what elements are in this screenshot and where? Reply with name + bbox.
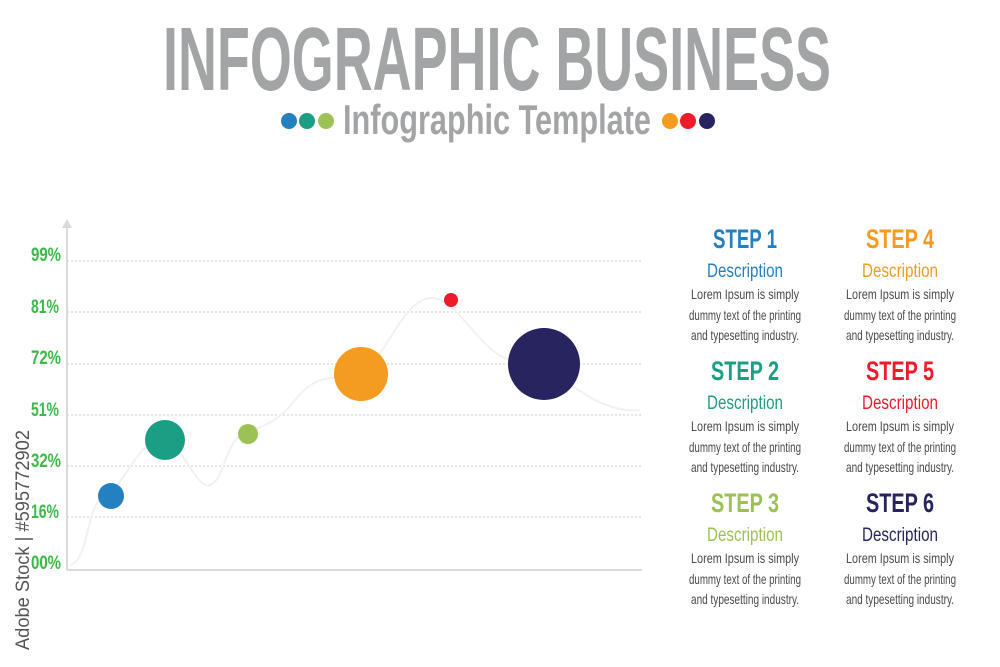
step 5: Description: [862, 393, 938, 414]
watermark id: Adobe Stock | #595772902: [13, 430, 34, 650]
step 5: [844, 356, 956, 475]
step 5: STEP 5: [866, 356, 934, 386]
axes: [67, 226, 642, 570]
step 3: and typesetting industry.: [691, 591, 799, 607]
step 5: and typesetting industry.: [846, 459, 954, 475]
y axis labels: 51%: [31, 400, 59, 421]
y axis labels: 99%: [31, 245, 61, 266]
steps panel: [689, 224, 956, 607]
subtitle: [281, 96, 715, 143]
step 3: Description: [707, 525, 783, 546]
step 6: STEP 6: [866, 488, 934, 518]
y axis labels: 32%: [31, 451, 61, 472]
y axis labels: 72%: [31, 348, 61, 369]
step 2: Description: [707, 393, 783, 414]
trend curve: [70, 298, 640, 565]
y axis labels: 16%: [31, 502, 59, 523]
y axis labels: 81%: [31, 297, 59, 318]
step 3: dummy text of the printing: [689, 571, 801, 587]
step 1: STEP 1: [713, 224, 777, 254]
chart: [31, 219, 642, 574]
step 4: [844, 224, 956, 343]
step 5: Lorem Ipsum is simply: [846, 418, 954, 434]
step 2: dummy text of the printing: [689, 439, 801, 455]
step 4: STEP 4: [866, 224, 934, 254]
step 1: [689, 224, 801, 343]
y axis labels: 00%: [31, 553, 61, 574]
step 1: Description: [707, 261, 783, 282]
y axis labels: [31, 245, 61, 574]
step 4: Lorem Ipsum is simply: [846, 286, 954, 302]
icon: right dots: [662, 113, 715, 129]
subtitle text: Infographic Template: [343, 96, 651, 143]
step 1: dummy text of the printing: [689, 307, 801, 323]
step 3: Lorem Ipsum is simply: [691, 550, 799, 566]
step 4: and typesetting industry.: [846, 327, 954, 343]
step 6: [844, 488, 956, 607]
step 2: STEP 2: [711, 356, 779, 386]
step 6: and typesetting industry.: [846, 591, 954, 607]
step 6: Description: [862, 525, 938, 546]
step 2: Lorem Ipsum is simply: [691, 418, 799, 434]
step 2: and typesetting industry.: [691, 459, 799, 475]
step 1: and typesetting industry.: [691, 327, 799, 343]
step 3: STEP 3: [711, 488, 779, 518]
bubbles: [98, 293, 580, 509]
icon: left dots: [281, 113, 334, 129]
step 6: Lorem Ipsum is simply: [846, 550, 954, 566]
step 3: [689, 488, 801, 607]
arrow: y axis: [62, 219, 72, 228]
grid lines: [67, 261, 642, 517]
step 2: [689, 356, 801, 475]
step 4: Description: [862, 261, 938, 282]
step 1: Lorem Ipsum is simply: [691, 286, 799, 302]
